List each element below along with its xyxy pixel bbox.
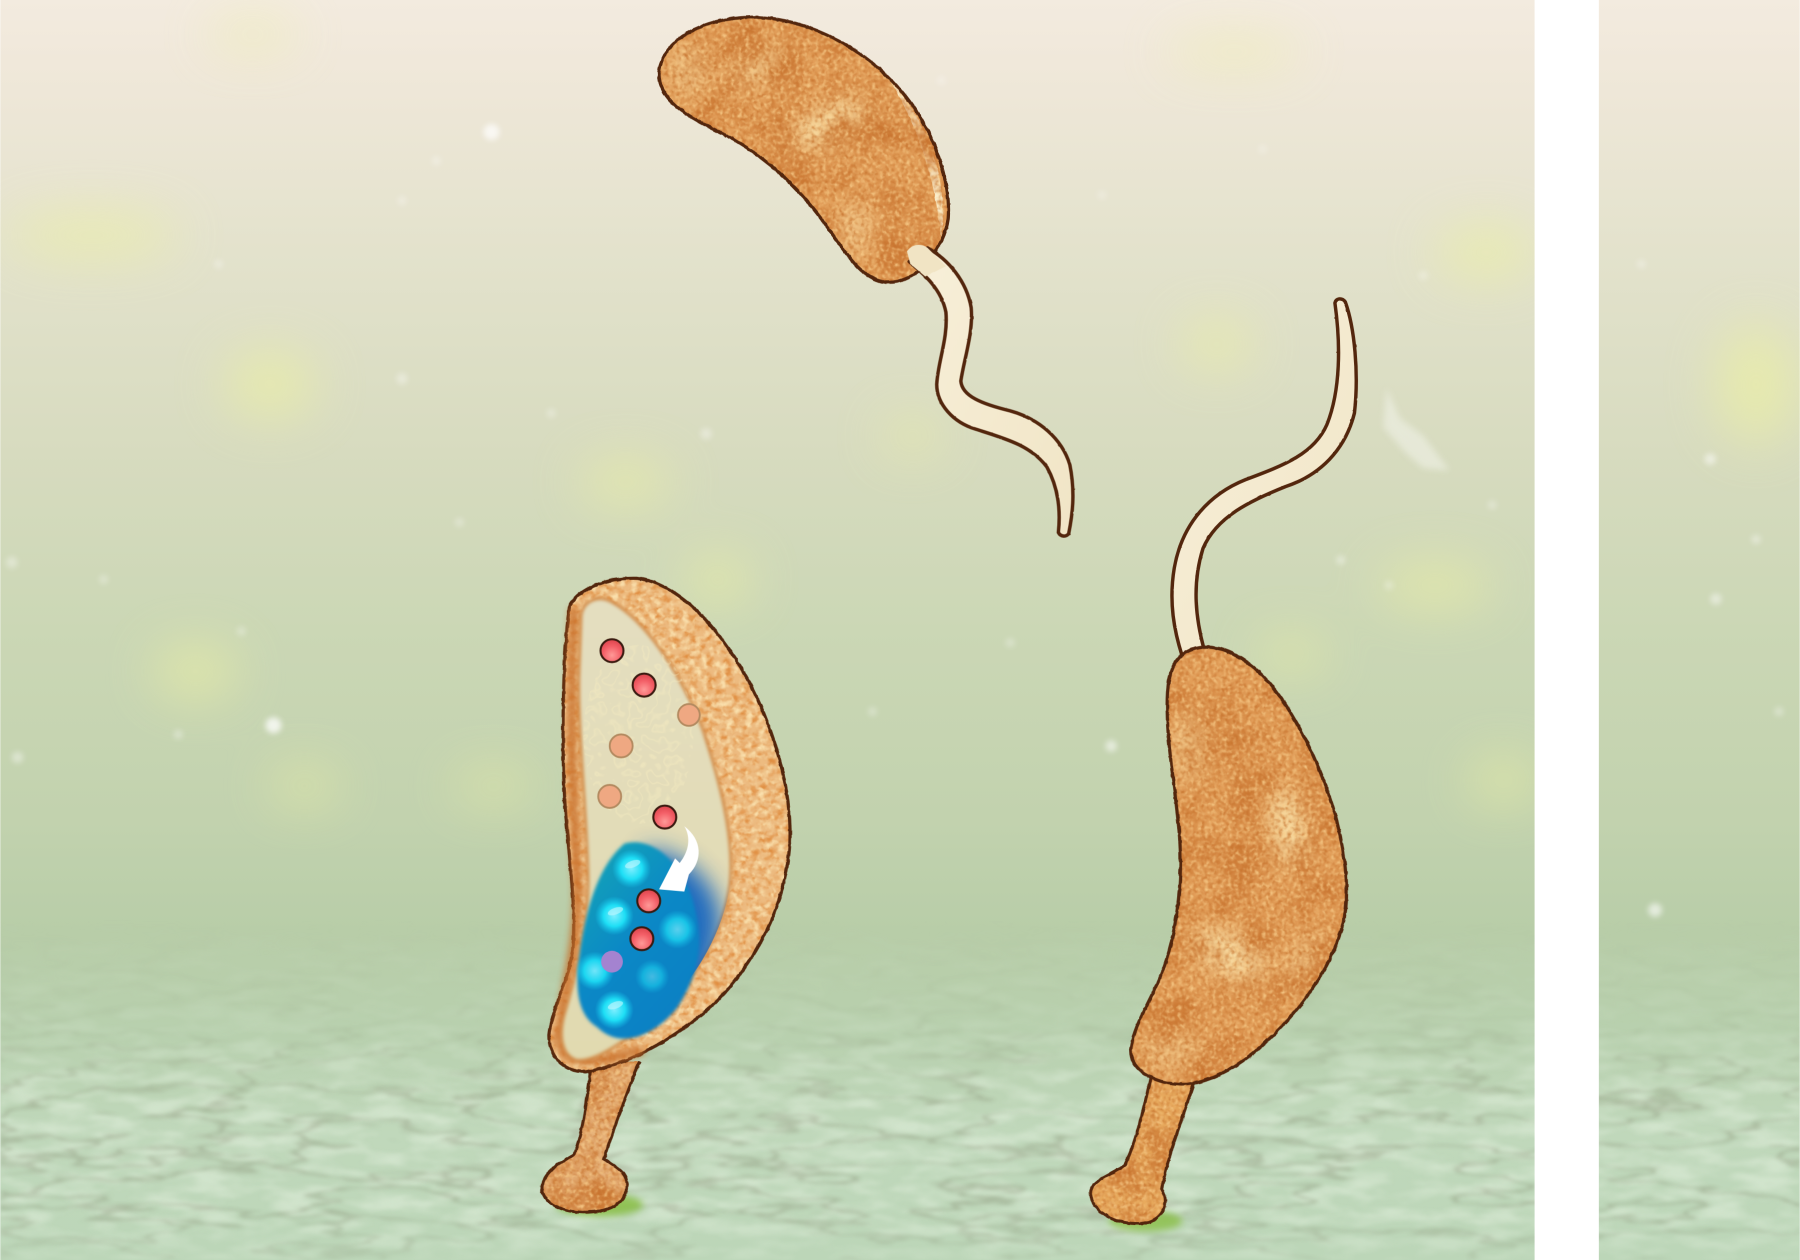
organelle xyxy=(577,842,699,1039)
luminous spots xyxy=(575,849,697,1029)
ground mottling xyxy=(0,1031,1800,1259)
faded particles xyxy=(598,704,700,808)
blue halo xyxy=(643,849,721,1033)
stalk and foot xyxy=(1090,1074,1194,1224)
gutter xyxy=(1535,0,1599,1260)
particles xyxy=(600,639,676,950)
floating specks xyxy=(6,76,1784,917)
fibre texture xyxy=(583,645,693,824)
inner face xyxy=(561,599,731,1060)
attached cell, cutaway xyxy=(542,578,790,1216)
foot shadow xyxy=(556,1193,643,1216)
flagellum xyxy=(907,245,1073,536)
stalk and foot xyxy=(542,1061,640,1212)
white wisp xyxy=(1383,388,1450,470)
swimming cell xyxy=(659,17,1073,536)
purple particle xyxy=(601,951,623,973)
cell body xyxy=(1131,647,1347,1084)
left wall shading xyxy=(558,608,643,1060)
foot shadow xyxy=(1109,1211,1182,1231)
yellow glow patches xyxy=(6,23,1796,802)
cell body xyxy=(659,17,948,282)
outer cell wall xyxy=(549,578,790,1072)
arrow xyxy=(659,826,699,892)
flagellum xyxy=(1172,299,1356,656)
attached cell, whole xyxy=(1090,299,1356,1231)
